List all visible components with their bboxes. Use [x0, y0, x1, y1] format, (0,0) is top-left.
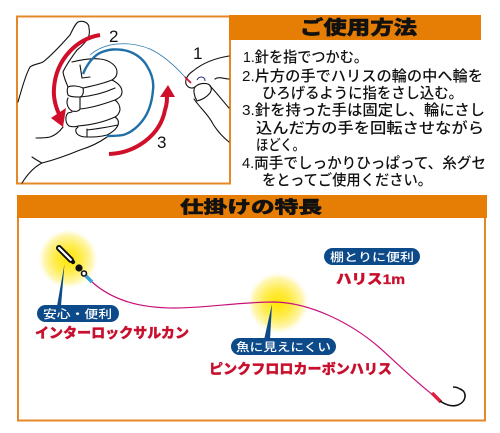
- callout: leader: 魚に見えにくい: [236, 340, 331, 354]
- callout: length: ハリス1m: [336, 271, 405, 287]
- text block: instructions: ほどく。: [256, 137, 305, 154]
- glow: swivel: [38, 229, 98, 289]
- heading: rig features: [17, 195, 487, 218]
- heading: rig features: 仕掛けの特長: [180, 197, 322, 217]
- text block: instructions: 込んだ方の手を回転させながら: [256, 119, 484, 137]
- callout: swivel: [35, 264, 189, 341]
- heading: usage: [229, 15, 481, 40]
- text block: instructions: 3.針を持った手は固定し、輪にさし: [242, 102, 485, 119]
- text block: instructions: ひろげるように指をさし込む。: [262, 85, 463, 102]
- label: 1: 1: [193, 44, 202, 63]
- icon: left hand: [18, 21, 122, 183]
- arrow: rotation 3: [109, 85, 175, 154]
- label: 3: 3: [157, 133, 166, 152]
- callout: swivel: インターロックサルカン: [35, 325, 189, 341]
- arrow: rotation 2: [51, 35, 100, 127]
- icon: interlock swivel: [59, 248, 92, 282]
- label: 2: 2: [109, 27, 118, 46]
- text block: instructions: 1.針を指でつかむ。: [243, 49, 368, 66]
- callout: length: 棚とりに便利: [330, 250, 414, 264]
- text block: instructions: 2.片方の手でハリスの輪の中へ輪を: [242, 68, 483, 85]
- panel: usage illustration: [17, 16, 230, 184]
- text block: instructions: をとってご使用ください。: [262, 171, 432, 189]
- callout: leader: [209, 304, 392, 377]
- icon: fish hook: [432, 387, 465, 406]
- text block: instructions: 4.両手でしっかりひっぱって、糸グセ: [242, 154, 486, 172]
- line: pink leader: [92, 282, 433, 395]
- callout: swivel: 安心・便利: [43, 307, 112, 321]
- callout: length: [324, 248, 420, 287]
- icon: hook tip: [185, 77, 191, 83]
- callout: leader: ピンクフロロカーボンハリス: [209, 361, 392, 377]
- line: blue loop: [83, 44, 185, 136]
- glow: leader: [247, 272, 309, 334]
- heading: usage: ご使用方法: [300, 16, 417, 39]
- icon: right hand with hook: [186, 56, 229, 142]
- text block: instructions: [242, 49, 486, 189]
- panel: rig features: [17, 195, 487, 420]
